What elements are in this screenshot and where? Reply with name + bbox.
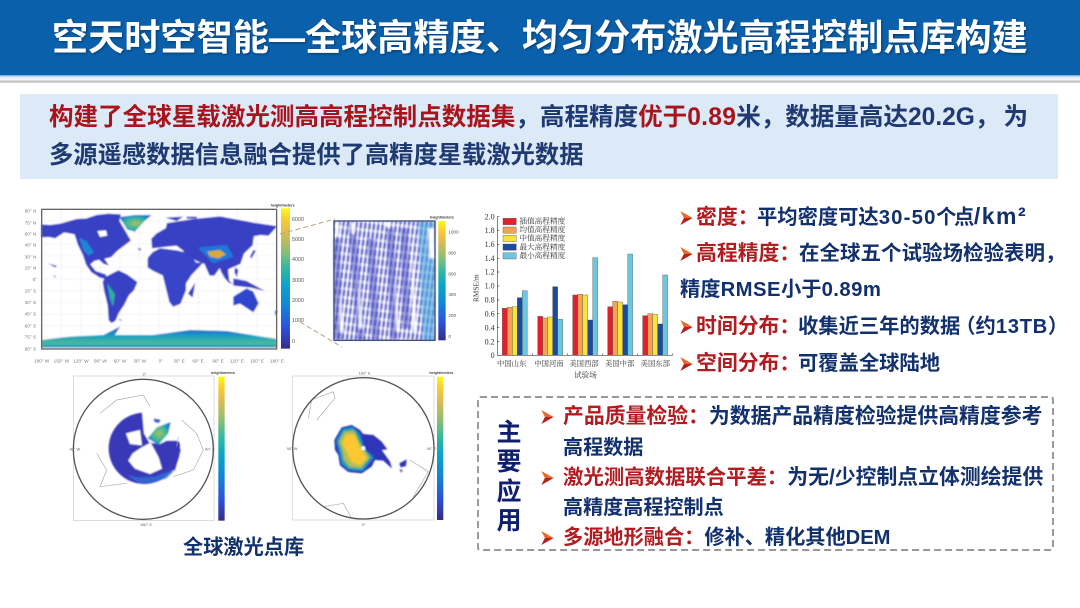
application: joint adjustment — [541, 466, 1043, 519]
summary line 1: 构建了全球星载激光测高高程控制点数据集，高程精度优于0.89米，数据量高达20.2G，为 — [49, 104, 1028, 131]
application: product quality check: 产品质量检验：为数据产品精度检验提供高精度参考 — [563, 405, 1042, 428]
inset track map: height/meters — [430, 215, 454, 219]
world map: 30° N — [25, 254, 36, 259]
header banner — [0, 0, 1080, 83]
bar chart: RMSE by test site: RMSE/m — [472, 274, 481, 302]
world map: 0° — [33, 277, 37, 282]
world map: 15° S — [25, 289, 36, 294]
world map: 180° E — [270, 358, 284, 363]
key metrics list — [680, 203, 1068, 375]
world map: 90° W — [94, 358, 107, 363]
world map: 15° N — [25, 266, 36, 271]
world map colorbar labels: 4000 — [292, 257, 304, 263]
legend: 插值高程精度 — [519, 216, 566, 226]
legend: 最大高程精度 — [519, 241, 566, 251]
world map: 180° W — [34, 358, 50, 363]
metric: spatial distribution: 空间分布： — [696, 352, 800, 375]
group: Central US — [608, 254, 633, 355]
summary panel — [20, 94, 1058, 179]
metric: spatial distribution — [680, 352, 940, 375]
group: Eastern US — [643, 275, 668, 355]
arctic map: 90° W — [69, 447, 80, 452]
world map: 30° E — [173, 358, 185, 363]
bar chart: RMSE by test site: 1.0 — [485, 282, 495, 291]
antarctic map: height/meters — [429, 371, 453, 375]
bar chart: RMSE by test site: 0.4 — [485, 323, 495, 332]
world map: 45° N — [25, 243, 36, 248]
world map: 60° N — [25, 231, 36, 236]
summary line 2: 多源遥感数据信息融合提供了高精度星载激光数据 — [49, 142, 584, 169]
arctic map: 0° — [143, 371, 147, 376]
legend: 中值高程精度 — [519, 233, 566, 243]
South America — [103, 271, 137, 322]
world map: 120° E — [230, 358, 244, 363]
Australia — [233, 288, 259, 312]
zoom connector lines — [280, 219, 342, 347]
world map: 0° — [159, 358, 163, 363]
metric: time distribution: 时间分布： — [696, 315, 800, 338]
world map: 90° N — [25, 208, 36, 213]
world map colorbar labels: 5000 — [292, 237, 304, 243]
application: product quality check: 高程数据 — [563, 437, 643, 459]
arctic map — [69, 371, 235, 527]
bar chart: RMSE by test site: 1.4 — [485, 254, 495, 263]
legend — [503, 216, 566, 260]
bar chart: RMSE by test site: 0.6 — [485, 309, 495, 318]
arctic map: 90° E — [205, 447, 215, 452]
bar chart: RMSE by test site: 1.2 — [485, 268, 495, 277]
bar chart: RMSE by test site — [472, 212, 673, 380]
bar chart: RMSE by test site: 中国河南 — [534, 359, 564, 368]
world map: 75° N — [25, 220, 36, 225]
bar chart: RMSE by test site: 0.2 — [485, 337, 495, 346]
inset track map: 600 — [448, 271, 456, 276]
vertical heading: 主要应用 — [496, 419, 522, 535]
bar chart: RMSE by test site: 试验场 — [574, 370, 597, 380]
inset track map: 200 — [448, 313, 456, 318]
world map: 90° S — [25, 346, 36, 351]
antarctic map: 90° E — [427, 446, 437, 451]
world map: 150° E — [250, 358, 264, 363]
main applications panel — [477, 396, 1054, 551]
world map: 75° S — [25, 335, 36, 340]
metric: elevation accuracy: 在全球五个试验场检验表明， — [799, 242, 1066, 265]
Africa — [148, 249, 202, 306]
inset track map: 400 — [448, 292, 456, 297]
application: joint adjustment: 高精度高程控制点 — [563, 497, 724, 519]
antarctic map: 0° — [362, 522, 366, 527]
world map colorbar labels — [292, 217, 304, 345]
bar chart: RMSE by test site: 2.0 — [485, 212, 495, 221]
legend: 最小高程精度 — [519, 250, 566, 260]
inset track map: 1000 — [448, 230, 459, 235]
group: Henan — [538, 287, 563, 355]
world map colorbar labels: 3000 — [292, 278, 304, 284]
title: 空天时空智能—全球高精度、均匀分布激光高程控制点库构建 — [52, 17, 1028, 58]
inset track map: 0 — [448, 334, 451, 339]
application: joint adjustment: 激光测高数据联合平差：为无/少控制点立体测绘提供 — [563, 466, 1043, 489]
antarctic map — [287, 371, 453, 527]
North America — [42, 214, 130, 278]
metric: spatial distribution: 可覆盖全球陆地 — [798, 353, 940, 375]
metric: elevation accuracy — [680, 242, 1066, 301]
world map: 120° W — [73, 358, 89, 363]
bar chart: RMSE by test site: 美国西部 — [569, 359, 599, 368]
Antarctica — [42, 327, 277, 348]
inset track map — [333, 215, 459, 340]
world map: 90° E — [212, 358, 224, 363]
world map: 30° S — [25, 300, 36, 305]
world map: 45° S — [25, 312, 36, 317]
caption: 全球激光点库 — [183, 537, 304, 559]
world map: 60° W — [114, 358, 127, 363]
world map colorbar labels: 6000 — [292, 217, 304, 223]
arctic map: 180° E — [140, 522, 152, 527]
Tibet plateau — [207, 250, 226, 258]
metric: elevation accuracy: 精度RMSE小于0.89m — [680, 279, 881, 301]
world map colorbar labels: 2000 — [292, 298, 304, 304]
Eurasia — [152, 217, 276, 281]
world map: height/meters — [271, 203, 295, 207]
metric: density: 平均密度可达30-50个点/km² — [757, 203, 1027, 229]
bar chart: RMSE by test site: 美国东部 — [641, 359, 671, 368]
inset track map: 800 — [448, 250, 456, 255]
bar chart: RMSE by test site: 1.6 — [485, 240, 495, 249]
bar chart: RMSE by test site: 0.8 — [485, 296, 495, 305]
world map: 60° S — [25, 323, 36, 328]
antarctic map: 90° W — [287, 446, 298, 451]
bar chart: RMSE by test site: 中国山东 — [497, 359, 527, 368]
bar chart: RMSE by test site: 0 — [491, 351, 495, 360]
arctic map: height/meters — [211, 371, 235, 375]
antarctic map: 180° E — [359, 371, 371, 376]
world map: 60° E — [192, 358, 204, 363]
application: multi-source terrain fusion: 多源地形融合：修补、精化其他DEM — [563, 527, 891, 549]
Greenland — [119, 215, 152, 232]
world map colorbar labels: 1000 — [292, 318, 304, 324]
metric: density: 密度： — [696, 206, 759, 229]
metric: time distribution — [680, 314, 1068, 338]
world map: 30° W — [133, 358, 147, 363]
bar chart: RMSE by test site: 1.8 — [485, 226, 495, 235]
metric: time distribution: 收集近三年的数据（约13TB） — [798, 316, 1068, 338]
world map — [25, 203, 295, 363]
bar chart: RMSE by test site: 美国中部 — [605, 359, 635, 368]
world map: 150° W — [54, 358, 70, 363]
group: Shandong — [502, 291, 527, 355]
metric: elevation accuracy: 高程精度： — [696, 242, 800, 265]
application: product quality check — [541, 404, 1042, 459]
world map colorbar labels: 0 — [292, 339, 295, 345]
group: Western US — [573, 258, 598, 355]
islands — [118, 217, 278, 321]
legend: 均值高程精度 — [519, 224, 566, 234]
